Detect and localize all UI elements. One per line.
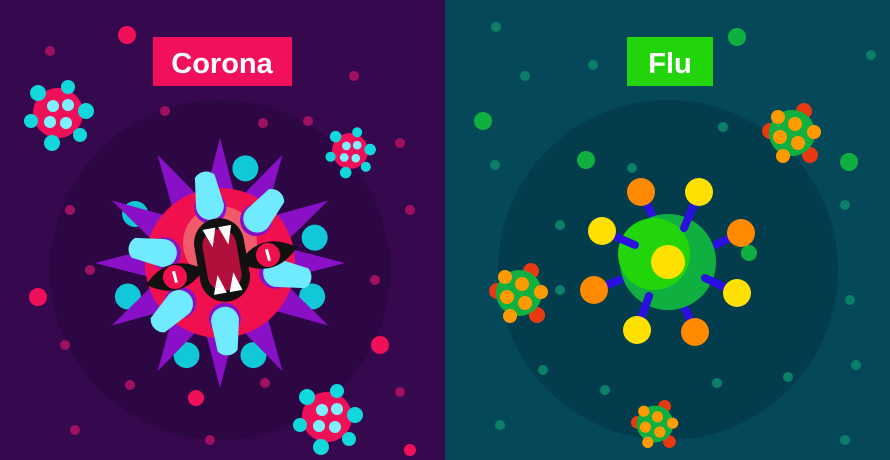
panel: corona — [0, 0, 445, 460]
icon: main corona virus — [95, 138, 345, 388]
icon: small corona virus bottom — [293, 384, 363, 455]
icon: small flu virus bottom — [631, 400, 678, 448]
icon: main flu virus — [580, 178, 755, 346]
mouth — [190, 214, 254, 306]
icon: small flu virus left — [489, 263, 548, 323]
title: Flu: Flu — [648, 48, 692, 80]
panel: flu — [445, 0, 890, 460]
title: Flu — [627, 37, 713, 86]
title: Corona: Corona — [171, 48, 274, 80]
icon: small corona virus right — [326, 127, 376, 178]
scattered teal dots — [490, 22, 876, 445]
scattered pink dots — [45, 46, 415, 445]
right eye — [236, 235, 300, 275]
left eye — [143, 257, 207, 297]
icon: small flu virus top-right — [762, 103, 821, 163]
icon: small corona virus top-left — [24, 80, 94, 151]
title: Corona — [153, 37, 292, 86]
